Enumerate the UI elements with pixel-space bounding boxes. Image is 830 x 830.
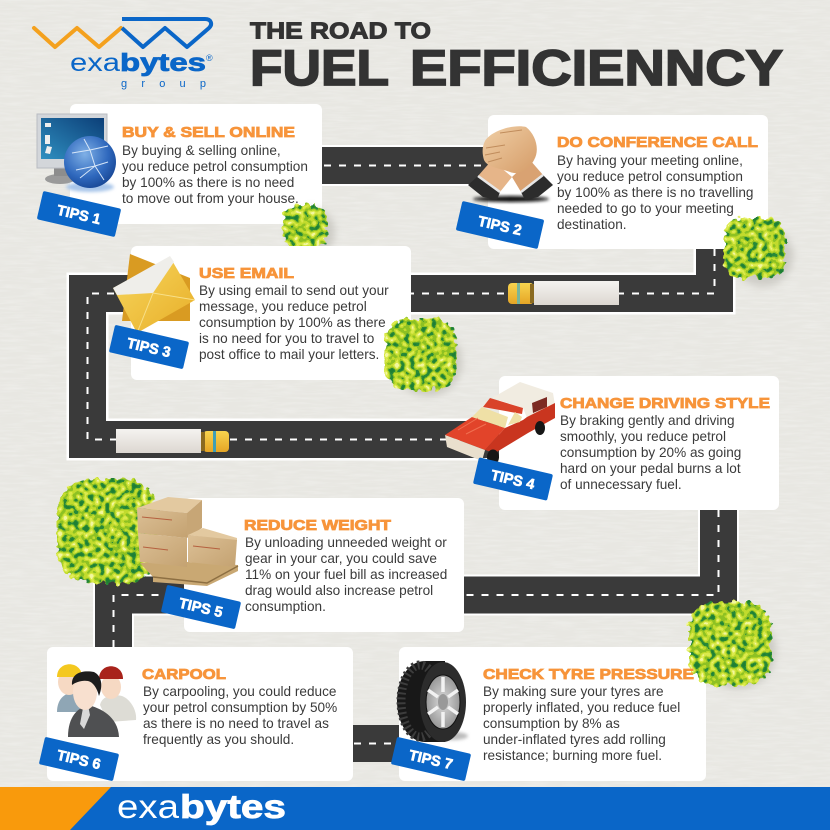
footer orange corner	[0, 787, 111, 830]
tips 2 badge: TIPS 2	[476, 214, 523, 239]
truck on lower road	[116, 429, 229, 453]
heading: USE EMAIL	[199, 265, 294, 282]
tips 7 badge: TIPS 7	[407, 748, 454, 773]
tips 4 badge	[473, 457, 553, 501]
title	[250, 18, 783, 96]
panel: tip 2 conference call	[456, 115, 768, 249]
icon: envelope	[113, 254, 195, 333]
icon: red pickup truck	[445, 382, 555, 464]
body text: your petrol consumption by 50%	[143, 700, 337, 715]
logo word exa: exa	[70, 49, 120, 77]
body text: message, you reduce petrol	[199, 299, 367, 314]
icon: tyre	[397, 661, 468, 742]
tips 6 badge: TIPS 6	[55, 748, 102, 773]
tips 7 badge	[391, 737, 471, 781]
body text: By using email to send out your	[199, 283, 389, 298]
logo wave: orange	[34, 28, 121, 47]
tips 5 badge: TIPS 5	[177, 596, 224, 621]
body text: resistance; burning more fuel.	[483, 748, 662, 763]
body text	[560, 413, 741, 492]
body text: is no need for you to travel to	[199, 331, 374, 346]
tree near tip 7	[689, 602, 776, 689]
tips 1 badge: TIPS 1	[55, 203, 102, 228]
logo word bytes: bytes	[120, 49, 206, 77]
road segment 3	[114, 510, 718, 647]
body text: By making sure your tyres are	[483, 684, 664, 699]
body text: consumption by 8% as	[483, 716, 620, 731]
logo word group: group	[121, 78, 206, 90]
footer word exa: exa	[117, 788, 180, 825]
body text	[122, 143, 308, 206]
tips 2 badge	[456, 201, 544, 249]
tips 1 badge	[37, 191, 121, 237]
body text: consumption.	[245, 599, 326, 614]
panel: tip 4 change driving style	[445, 376, 779, 510]
icon: computer with globe	[37, 114, 116, 192]
tips 5 badge	[161, 585, 241, 629]
title line 2 word FUEL: FUEL	[250, 40, 389, 96]
body text: hard on your pedal burns a lot	[560, 461, 741, 476]
icon: three workers	[57, 664, 136, 737]
tree near tip 1	[283, 205, 335, 256]
truck on upper road	[508, 281, 619, 305]
icon: handshake	[468, 126, 553, 202]
body text	[143, 684, 337, 747]
body text	[199, 283, 389, 362]
body text	[245, 535, 447, 614]
body text: consumption by 100% as there	[199, 315, 386, 330]
body text: consumption by 20% as going	[560, 445, 741, 460]
footer word bytes: bytes	[180, 788, 286, 825]
body text: drag would also increase petrol	[245, 583, 433, 598]
body text: you reduce petrol consumption	[122, 159, 308, 174]
logo: exabytes group	[34, 19, 213, 90]
body text: needed to go to your meeting	[557, 201, 734, 216]
body text: 11% on your fuel bill as increased	[245, 567, 447, 582]
heading: CHANGE DRIVING STYLE	[560, 395, 770, 412]
tips 3 badge	[109, 325, 189, 369]
body text	[557, 153, 753, 232]
panel: tip 1 buy and sell online	[37, 104, 322, 237]
body text: destination.	[557, 217, 627, 232]
tips 3 badge: TIPS 3	[125, 336, 172, 361]
panel: tip 3 use email	[109, 246, 411, 380]
body text: By carpooling, you could reduce	[143, 684, 336, 699]
tree near tip 5	[57, 479, 158, 583]
icon: boxes on pallet	[137, 497, 238, 586]
body text: gear in your car, you could save	[245, 551, 437, 566]
tips 6 badge	[39, 737, 119, 781]
body text: properly inflated, you reduce fuel	[483, 700, 680, 715]
body text	[483, 684, 680, 763]
panel: tip 7 check tyre pressure	[391, 602, 776, 781]
body text: by 100% as there is no travelling	[557, 185, 753, 200]
road segment 2	[88, 249, 714, 440]
heading: BUY & SELL ONLINE	[122, 124, 295, 141]
road network	[88, 166, 718, 744]
tips 4 badge: TIPS 4	[489, 468, 536, 493]
body text: by 100% as there is no need	[122, 175, 294, 190]
road segment 1	[322, 145, 488, 186]
tree near tip 3	[385, 319, 462, 396]
body text: By having your meeting online,	[557, 153, 743, 168]
footer band	[0, 787, 830, 830]
heading: DO CONFERENCE CALL	[557, 134, 758, 151]
road segment 4	[353, 725, 400, 762]
title line 2 word EFFICIENNCY: EFFICIENNCY	[410, 40, 783, 96]
heading: REDUCE WEIGHT	[244, 517, 391, 534]
panel: tip 6 carpool	[39, 647, 353, 781]
body text: you reduce petrol consumption	[557, 169, 743, 184]
panel: tip 5 reduce weight	[137, 497, 464, 632]
title line 1: THE ROAD TO	[250, 18, 431, 44]
body text: smoothly, you reduce petrol	[560, 429, 726, 444]
body text: frequently as you should.	[143, 732, 294, 747]
body text: By braking gently and driving	[560, 413, 735, 428]
body text: post office to mail your letters.	[199, 347, 379, 362]
logo wave: blue	[122, 19, 211, 47]
body text: under-inflated tyres add rolling	[483, 732, 666, 747]
body text: as there is no need to travel as	[143, 716, 329, 731]
body text: By unloading unneeded weight or	[245, 535, 447, 550]
body text: By buying & selling online,	[122, 143, 281, 158]
heading: CARPOOL	[142, 666, 226, 683]
heading: CHECK TYRE PRESSURE	[483, 666, 694, 683]
body text: of unnecessary fuel.	[560, 477, 682, 492]
tree near tip 2	[724, 218, 793, 286]
logo registered mark: ®	[206, 53, 213, 63]
body text: to move out from your house.	[122, 191, 299, 206]
